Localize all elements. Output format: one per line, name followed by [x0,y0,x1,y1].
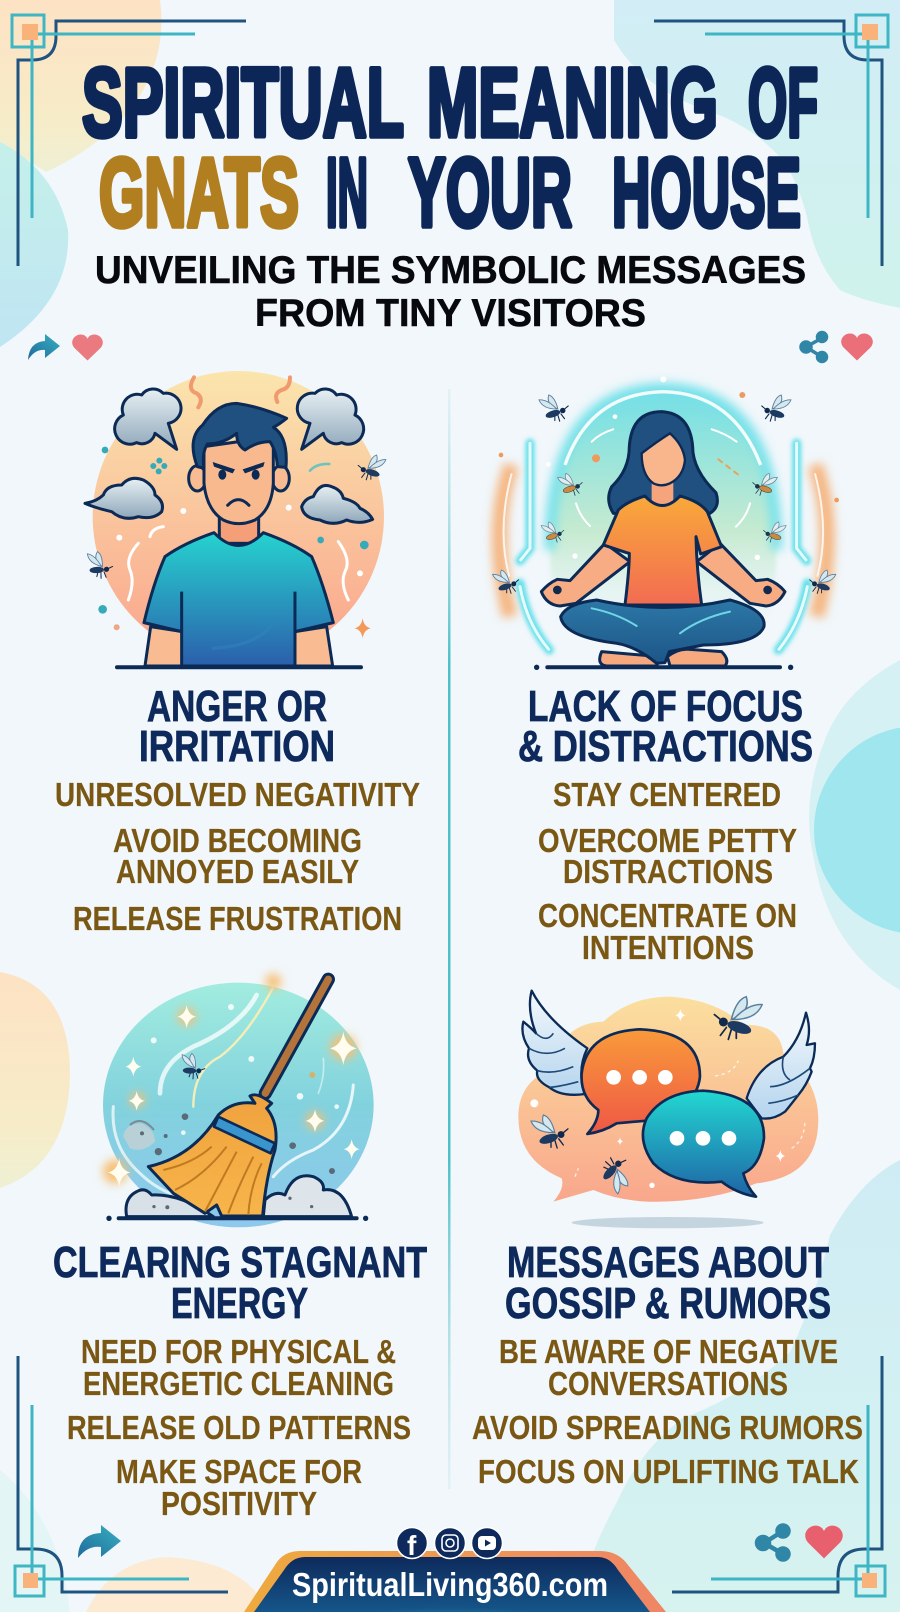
point list: RELEASE OLD PATTERNS [67,1409,411,1446]
halo glow [550,388,777,650]
ground shadow [572,1217,764,1228]
floor line [106,1216,368,1221]
illustration: speech bubbles with wings [518,991,818,1228]
sparkles [530,1009,785,1188]
dust cloud right [263,1176,352,1217]
arms [541,543,785,606]
hand details [553,586,772,594]
right foot [667,649,727,666]
face [204,437,273,524]
point list: CONCENTRATE ON [538,897,797,934]
footer banner [244,1551,666,1612]
gray puff [123,1123,155,1150]
halo arc [565,392,761,465]
title: IN [326,138,368,247]
point list: AVOID BECOMING [113,822,362,859]
illustration: broom [103,974,374,1227]
icon: top left heart [72,335,103,360]
gnat [176,1050,208,1081]
icon: instagram [434,1528,466,1558]
icon: bottom right share [757,1526,788,1560]
icon: top right heart [841,334,873,360]
point list: UNRESOLVED NEGATIVITY [55,776,420,813]
icon: youtube [472,1528,502,1558]
point list: CONVERSATIONS [548,1365,788,1402]
sparkles [108,1005,360,1187]
background blob: right cyan [814,726,900,934]
heading: LACK OF FOCUS [528,682,803,731]
point list: NEED FOR PHYSICAL & [81,1333,396,1370]
swirls [113,988,353,1198]
subtitle [95,249,806,335]
neon bars [520,443,807,650]
subtitle: FROM TINY VISITORS [255,292,646,335]
point list [55,776,420,937]
icon: facebook [396,1528,428,1561]
panel: lack of focus [518,682,813,966]
orange bubble [582,1029,700,1134]
sparkles glow [103,974,356,1184]
broom head [148,1095,276,1216]
point list [67,1333,411,1522]
icon: top left arrow [28,334,60,360]
wing right [747,1013,815,1119]
gnat right [358,455,386,480]
background blob: bottom left teal tint [0,1470,70,1612]
frame: bottom right corner [672,1356,885,1596]
panel: messages about gossip [472,1238,863,1490]
eyes and brows [213,462,265,480]
hair [193,403,287,468]
background blob: left teal [0,142,68,347]
frame: top left corner [12,15,246,266]
left foot [600,652,660,666]
white swooshes [576,429,750,527]
gnats [531,997,762,1196]
title: MEANING [427,48,718,157]
icon: facebook: f [407,1530,417,1561]
background blob: bottom right [574,1160,900,1612]
heat flames [191,377,290,407]
face [642,433,685,485]
center divider [448,389,450,1489]
wing left [522,991,587,1095]
point list [538,776,797,966]
teal bubble dots [670,1131,736,1146]
panel: anger or irritation [55,682,420,937]
gnat left [82,549,115,580]
dust cloud left [126,1190,213,1217]
broom strands [163,1147,262,1215]
point list: RELEASE FRUSTRATION [73,900,402,937]
ears [189,466,289,491]
steam cloud left [115,389,181,449]
arms [145,627,333,666]
heading: IRRITATION [139,722,335,771]
steam cloud right [297,389,364,449]
point list: MAKE SPACE FOR [116,1453,362,1490]
heading [53,1238,427,1328]
circle background [103,983,374,1227]
heading: ANGER OR [147,682,327,731]
sun circle [93,371,384,662]
illustration: meditating woman [493,376,839,670]
gnats [493,395,836,593]
hair [609,412,717,513]
heading: & DISTRACTIONS [518,722,813,771]
heading: CLEARING STAGNANT [53,1238,427,1287]
heading [139,682,335,771]
background blob: top right [614,0,900,308]
title: OF [748,48,818,157]
point list: STAY CENTERED [553,776,781,813]
floor line [534,665,793,670]
dots [98,447,369,614]
point list: BE AWARE OF NEGATIVE [499,1333,838,1370]
website: SpiritualLiving360.com [292,1566,608,1603]
background blob: left peach [0,972,70,1188]
subtitle: UNVEILING THE SYMBOLIC MESSAGES [95,249,806,292]
teal bubble [643,1091,764,1197]
orange bubble dots [606,1070,673,1085]
shirt [603,496,722,605]
broom band [214,1117,275,1153]
icon: top right share [801,332,826,362]
title: YOUR [408,138,572,247]
dots [499,392,839,502]
neck [219,513,259,543]
orange side arcs [500,465,827,617]
t-shirt [144,533,333,666]
cloud left [85,478,162,518]
background blob: right light teal [809,660,900,990]
point list: POSITIVITY [161,1485,317,1522]
point list [472,1333,863,1490]
point list: DISTRACTIONS [563,853,773,890]
sparkle [355,618,371,638]
panel: clearing stagnant energy [53,1238,427,1522]
neck [652,482,673,505]
background blob: top left peach [0,0,161,172]
broom handle [265,979,328,1093]
legs [561,600,764,663]
point list: INTENTIONS [582,929,754,966]
title: GNATS [99,138,299,247]
title [82,48,818,247]
icon: bottom left arrow [78,1525,121,1558]
dots [151,1004,339,1135]
point list: OVERCOME PETTY [538,822,797,859]
background blob: bottom left peach [86,1557,270,1612]
frame: bottom left corner [15,1356,228,1596]
peach backdrop [518,997,818,1202]
cloud right [302,485,373,523]
heading [505,1238,831,1328]
floor line [115,665,363,669]
mouth [228,500,249,505]
point list: ANNOYED EASILY [116,853,359,890]
icon: bottom right heart [805,1526,843,1558]
point list: ENERGETIC CLEANING [83,1365,394,1402]
wavy lines [128,527,348,600]
frame: top right corner [654,15,888,266]
illustration: angry man [82,371,386,669]
title: SPIRITUAL [82,48,404,157]
heading: ENERGY [171,1279,308,1328]
heading [518,682,813,771]
